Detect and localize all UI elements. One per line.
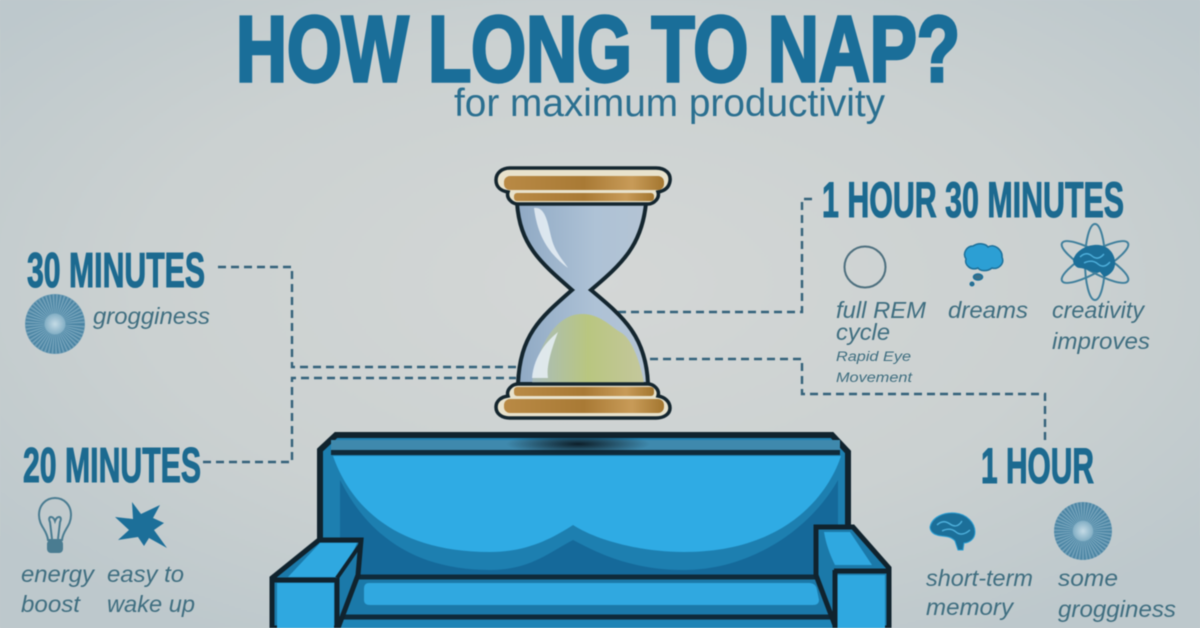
left arm: [272, 540, 361, 628]
sofa: [272, 433, 890, 628]
subtitle: for maximum productivity: [454, 82, 885, 125]
label: full REM cycle: full REM: [836, 297, 927, 323]
seat cushion: [364, 583, 819, 605]
seat front: [338, 620, 836, 628]
back top band: [331, 440, 840, 450]
hourglass: [496, 168, 670, 418]
back top line: [331, 450, 840, 455]
panel: 20 minutes: [21, 439, 201, 617]
label: some grogginess: grogginess: [1058, 596, 1177, 622]
right arm: [816, 527, 890, 628]
sofa back: [320, 435, 848, 585]
label: creativity improves: [1052, 297, 1151, 354]
contact shadow: [506, 433, 650, 455]
label: energy boost: energy: [21, 561, 96, 587]
label: short-term memory: [926, 565, 1033, 620]
connector: 1 hour 30 minutes: [618, 199, 816, 312]
icon: sunburst: [1054, 502, 1112, 560]
label: energy boost: boost: [21, 591, 82, 617]
back lower shade: [340, 480, 838, 577]
label: grogginess: [93, 303, 211, 329]
icon: circle: [844, 246, 886, 288]
icon: brain: [930, 513, 975, 550]
icon: burst star: [115, 502, 167, 548]
top cap: [496, 168, 670, 204]
label: easy to wake up: [107, 561, 195, 617]
connector: 1 hour: [637, 359, 1045, 441]
label: easy to wake up: easy to: [107, 561, 184, 587]
label: full REM cycle: Movement: [836, 370, 913, 385]
connector: 30 minutes: [218, 267, 516, 367]
heading: 30 MINUTES: [27, 244, 205, 298]
label: creativity improves: creativity: [1052, 297, 1146, 323]
label: creativity improves: improves: [1052, 328, 1151, 354]
panel: 30 minutes: [25, 244, 211, 354]
label: short-term memory: short-term: [926, 565, 1033, 591]
panel: 1 hour 30 minutes: [822, 172, 1151, 385]
label: dreams: dreams: [948, 297, 1029, 323]
icon: sunburst: [25, 294, 85, 354]
seat top line: [356, 574, 818, 580]
sand: [532, 314, 644, 383]
connector: 20 minutes: [203, 378, 516, 462]
glass bulbs: [517, 203, 648, 384]
icon: lightbulb: [39, 498, 71, 552]
label: some grogginess: [1058, 565, 1177, 622]
title: HOW LONG TO NAP?: [236, 0, 960, 101]
label: easy to wake up: wake up: [107, 591, 195, 617]
seat front line: [342, 614, 834, 620]
label: full REM cycle: cycle: [836, 319, 890, 345]
heading: 20 MINUTES: [23, 439, 201, 493]
bottom cap: [496, 384, 670, 418]
back cushions: [333, 456, 841, 552]
icon: thought cloud: [965, 244, 1003, 286]
label: some grogginess: some: [1058, 565, 1118, 591]
label: energy boost: [21, 561, 96, 617]
label: full REM cycle: [836, 297, 927, 385]
icon: brain with atom orbits: [1057, 224, 1133, 300]
glass highlights: [532, 208, 568, 378]
label: short-term memory: memory: [926, 594, 1015, 620]
label: full REM cycle: Rapid Eye: [836, 349, 911, 364]
seat base: [336, 578, 838, 628]
panel: 1 hour: [926, 438, 1177, 622]
heading: 1 HOUR: [981, 438, 1094, 494]
